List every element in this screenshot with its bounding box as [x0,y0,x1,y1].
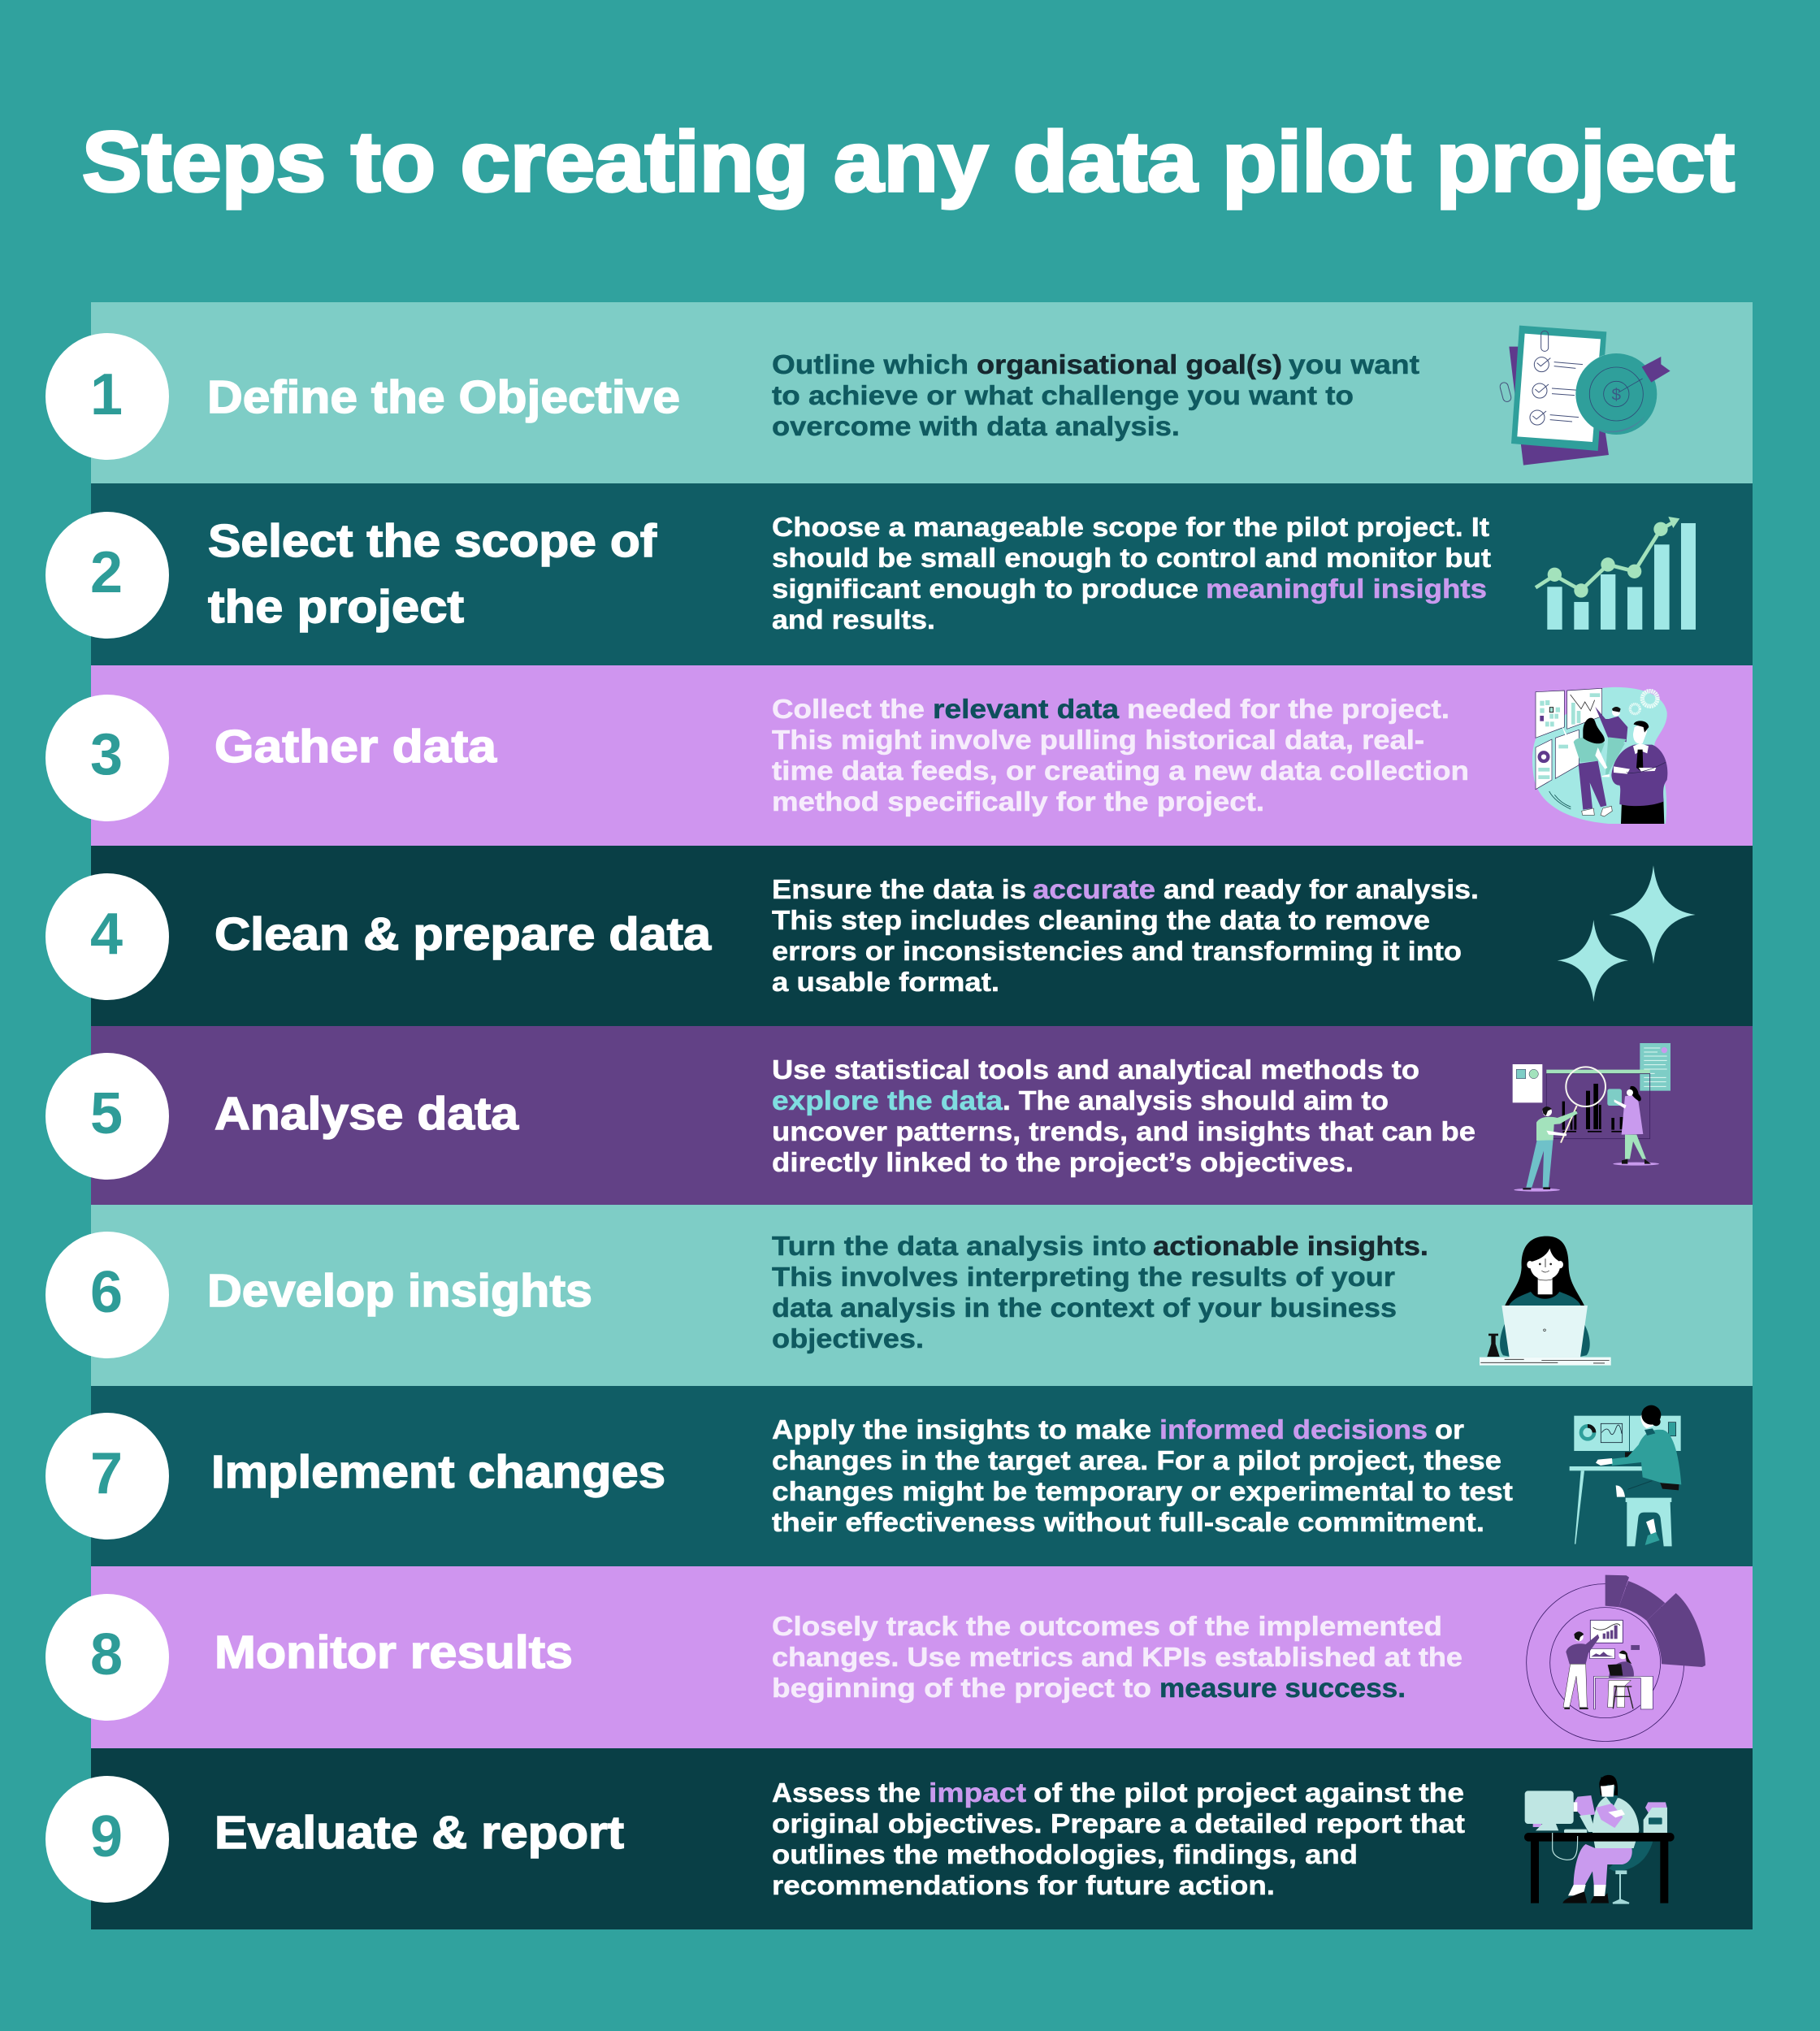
description 4: accurate [1033,874,1155,904]
description 3: method specifically for the project. [772,786,1264,816]
description 1: to achieve or what challenge you want to [772,380,1354,410]
band 9 [91,1748,1753,1929]
number badge 3 [46,695,169,821]
description 4: and ready for analysis. [1164,874,1479,904]
number badge 9 [46,1776,169,1903]
description 7: or [1435,1414,1464,1444]
number badge 3: 3 [90,722,123,787]
panel: step 6 develop insights [46,1205,1753,1386]
panel: step 4 clean and prepare data [46,846,1753,1026]
description 8 [772,1611,1462,1703]
number badge 5: 5 [90,1081,123,1146]
description 3 [772,694,1469,816]
description 5 [772,1054,1476,1177]
description 4 [772,874,1479,997]
icon: checklist and target: $ [1612,386,1622,405]
band 7 [91,1386,1753,1566]
description 1: organisational goal(s) [977,349,1282,379]
number badge 2: 2 [90,540,123,605]
band 3 [91,665,1753,846]
icon: woman at desk with clipboard [1524,1775,1675,1903]
heading 2: Select the scope of [208,515,657,567]
number badge 1: 1 [90,362,123,427]
number badge 9: 9 [90,1804,123,1869]
heading 1: Define the Objective [207,371,680,423]
description 6: Turn the data analysis into [772,1231,1146,1261]
panel: step 8 monitor results [46,1566,1753,1748]
heading 9: Evaluate & report [214,1807,624,1859]
description 2: should be small enough to control and monitor but [772,543,1491,573]
description 4: a usable format. [772,967,999,997]
icon: bar chart with trend line [1536,517,1696,630]
description 3: needed for the project. [1127,694,1450,724]
heading 3: Gather data [214,721,497,773]
description 7: informed decisions [1159,1414,1428,1444]
description 7: their effectiveness without full-scale commitment. [772,1507,1484,1537]
band 1 [91,302,1753,483]
band 6 [91,1205,1753,1386]
description 4: errors or inconsistencies and transforming it into [772,936,1462,966]
description 6 [772,1231,1428,1353]
description 3: relevant data [933,694,1120,724]
panel: step 3 gather data [46,665,1753,846]
description 5: Use statistical tools and analytical methods to [772,1054,1419,1085]
number badge 7: 7 [90,1441,123,1506]
icon: two people analysing a chart [1513,1043,1670,1192]
description 8: changes. Use metrics and KPIs established at the [772,1642,1462,1672]
heading 2: the project [208,581,464,633]
panel: step 2 select the scope [46,483,1753,665]
description 5: explore the data [772,1085,1003,1115]
description 5: directly linked to the project’s objectives. [772,1147,1354,1177]
heading 6: Develop insights [207,1265,592,1317]
number badge 6: 6 [90,1260,123,1325]
number badge 2 [46,512,169,639]
heading 2 [208,515,657,633]
description 7: Apply the insights to make [772,1414,1151,1444]
band 8 [91,1566,1753,1748]
description 9 [772,1778,1465,1900]
number badge 8: 8 [90,1622,123,1687]
description 6: actionable insights. [1153,1231,1428,1261]
number badge 8 [46,1594,169,1721]
number badge 1 [46,333,169,460]
description 9: outlines the methodologies, findings, and [772,1839,1358,1869]
description 3: Collect the [772,694,925,724]
description 6: objectives. [772,1323,924,1353]
description 9: of the pilot project against the [1034,1778,1464,1808]
description 2: and results. [772,604,935,634]
description 1 [772,349,1419,441]
band 2 [91,483,1753,665]
description 2: meaningful insights [1206,574,1487,604]
description 9: impact [929,1778,1026,1808]
description 8: beginning of the project to [772,1673,1151,1703]
panel: step 1 define the objective [46,302,1753,483]
description 3: time data feeds, or creating a new data collection [772,756,1469,786]
number badge 4: 4 [90,902,123,967]
description 8: measure success. [1159,1673,1406,1703]
description 1: Outline which [772,349,968,379]
panel: step 7 implement changes [46,1386,1753,1566]
icon: sparkles [1558,865,1696,1002]
description 6: data analysis in the context of your business [772,1293,1397,1323]
description 4: This step includes cleaning the data to remove [772,905,1430,935]
number badge 4 [46,873,169,1000]
description 2: significant enough to produce [772,574,1198,604]
description 7 [772,1414,1513,1537]
description 1: overcome with data analysis. [772,411,1180,441]
description 5: uncover patterns, trends, and insights that can be [772,1116,1476,1146]
heading 8: Monitor results [214,1626,573,1678]
panel: step 9 evaluate and report [46,1748,1753,1929]
number badge 7 [46,1413,169,1539]
icon: team reviewing dashboards [1532,687,1667,824]
panel: step 5 analyse data [46,1026,1753,1205]
description 2 [772,512,1491,634]
description 8: Closely track the outcomes of the implemented [772,1611,1442,1641]
description 6: This involves interpreting the results of your [772,1262,1395,1292]
band 4 [91,846,1753,1026]
description 2: Choose a manageable scope for the pilot project. It [772,512,1489,542]
number badge 5 [46,1053,169,1180]
band 5 [91,1026,1753,1205]
description 5: . The analysis should aim to [1003,1085,1389,1115]
description 9: original objectives. Prepare a detailed report that [772,1808,1465,1838]
icon: woman at laptop [1480,1236,1611,1366]
icon: pie dial with two people [1527,1575,1705,1742]
heading 4: Clean & prepare data [214,908,712,960]
description 7: changes in the target area. For a pilot project, these [772,1445,1502,1475]
description 1: you want [1289,349,1419,379]
icon: checklist and target [1499,326,1670,466]
number badge 6 [46,1232,169,1358]
description 7: changes might be temporary or experimental to test [772,1476,1513,1506]
icon: person at desk [1570,1405,1681,1546]
heading 5: Analyse data [214,1088,519,1140]
description 9: Assess the [772,1778,921,1808]
title: Steps to creating any data pilot project [82,115,1735,210]
description 4: Ensure the data is [772,874,1026,904]
description 3: This might involve pulling historical data, real- [772,725,1424,755]
description 9: recommendations for future action. [772,1870,1275,1900]
heading 7: Implement changes [211,1446,665,1498]
